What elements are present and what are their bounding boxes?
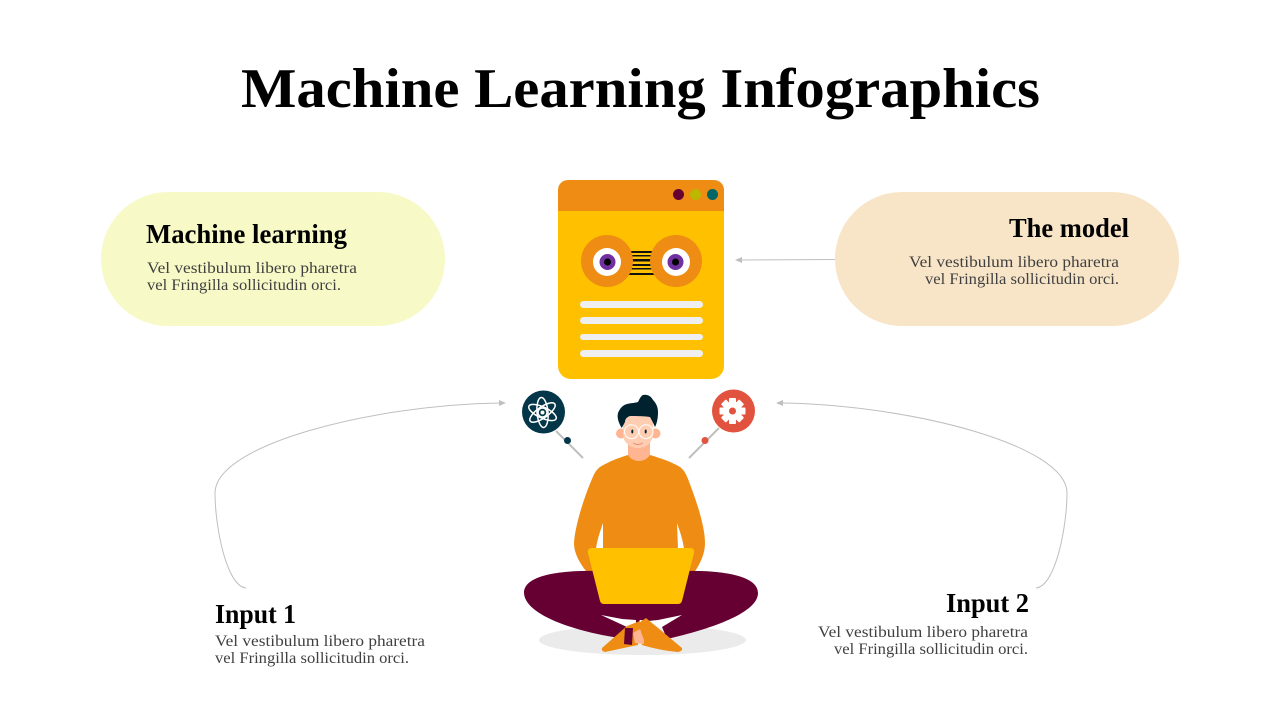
heading: machine learning: Machine learning <box>146 219 347 249</box>
text block: the model description: vel Fringilla sollicitudin orci. <box>925 271 1119 288</box>
text block: input 2 <box>818 588 1029 658</box>
sweater <box>574 455 705 578</box>
description: input 1: Vel vestibulum libero pharetra <box>215 633 425 650</box>
illustration: person with laptop <box>524 395 758 655</box>
face <box>623 412 653 448</box>
eyes and smile <box>631 430 647 444</box>
text block: machine learning description: Vel vestibulum libero pharetra <box>147 260 357 277</box>
arrow: input 1 to model <box>215 400 506 588</box>
description: input 1: vel Fringilla sollicitudin orci. <box>215 650 409 667</box>
text block: machine learning description <box>147 260 357 294</box>
heading: input 1: Input 1 <box>215 599 296 629</box>
description: input 2: Vel vestibulum libero pharetra <box>818 624 1028 641</box>
legs <box>524 571 758 639</box>
gap between thighs <box>601 615 682 628</box>
heading: the model: The model <box>1009 213 1129 243</box>
description: input 2: vel Fringilla sollicitudin orci. <box>834 641 1028 658</box>
arrow: input 2 to model <box>776 400 1067 588</box>
crossed feet <box>602 618 682 652</box>
ears <box>616 428 660 438</box>
laptop <box>588 548 694 604</box>
heading: input 2: Input 2 <box>946 588 1029 618</box>
neck <box>628 440 650 462</box>
text block: the model description: Vel vestibulum libero pharetra <box>909 254 1119 271</box>
icon: gear badge <box>689 390 755 458</box>
text block: the model description <box>909 254 1119 288</box>
panel: machine learning <box>101 192 445 326</box>
text block: machine learning description: vel Fringilla sollicitudin orci. <box>147 277 341 294</box>
hair <box>618 395 658 428</box>
description: input 1 <box>215 633 425 667</box>
title: Machine Learning Infographics <box>241 58 1040 120</box>
icon: atom badge <box>522 390 583 458</box>
floor shadow <box>539 625 746 655</box>
arrow: the model to window <box>735 257 835 263</box>
text block: input 1 <box>215 599 425 667</box>
glasses <box>624 425 653 439</box>
panel: the model <box>835 192 1179 326</box>
description: input 2 <box>818 624 1028 658</box>
icon: model window <box>558 180 724 379</box>
